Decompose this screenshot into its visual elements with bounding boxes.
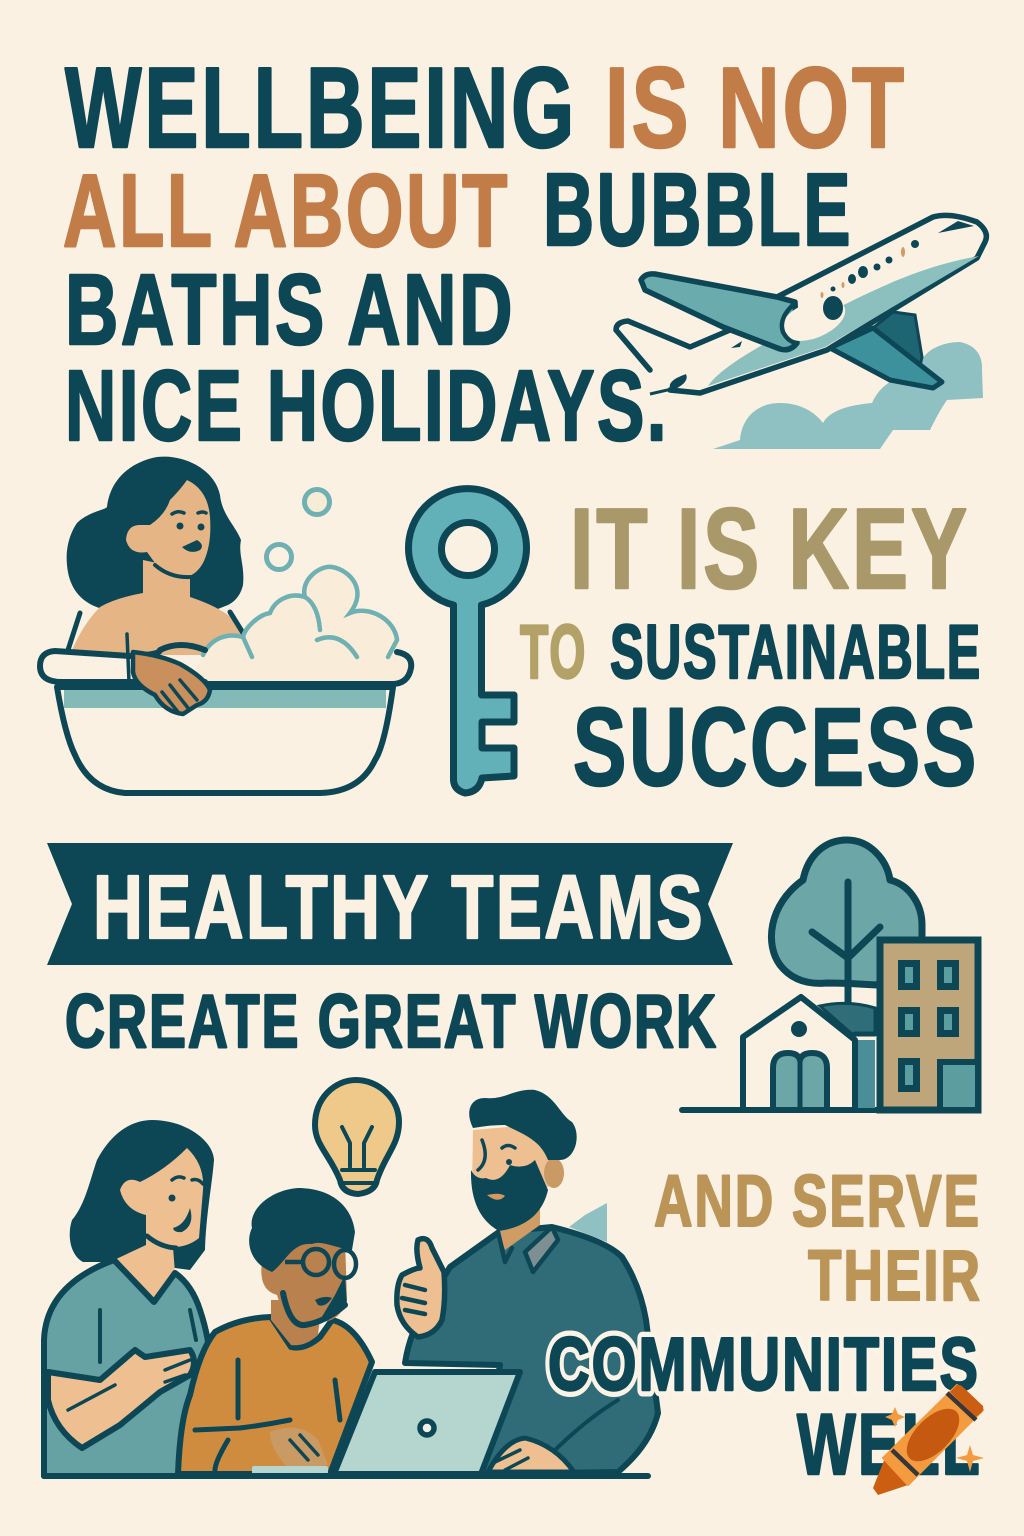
windows	[731, 240, 919, 348]
forearm and hand	[48, 1350, 194, 1448]
banner: healthy teams	[47, 843, 733, 965]
title: BATHS AND	[65, 254, 515, 366]
right hand on laptop	[488, 1438, 574, 1472]
house	[743, 997, 855, 1110]
crayon tip	[873, 1458, 908, 1495]
icon: airplane over cloud	[616, 215, 986, 449]
crayon cap	[950, 1385, 983, 1417]
subheading: create great work: CREATE GREAT WORK	[65, 979, 718, 1063]
teal background patch	[569, 1203, 607, 1242]
face	[261, 1236, 347, 1322]
windows	[902, 964, 956, 1088]
title	[63, 45, 907, 462]
title: NICE HOLIDAYS.	[65, 350, 669, 462]
text: it is key to sustainable success: TO	[520, 610, 587, 695]
face	[472, 1125, 555, 1205]
hair	[70, 1120, 214, 1270]
sweater	[178, 1317, 372, 1474]
keyboard base	[252, 1466, 328, 1474]
far wing and engine	[873, 312, 922, 375]
icon: woman in bubble bath	[40, 457, 412, 793]
neck and face	[114, 1148, 203, 1302]
tree	[771, 840, 922, 985]
person: bearded man in teal sweater	[397, 1090, 658, 1474]
glasses	[285, 1249, 356, 1278]
hand on keyboard	[270, 1428, 328, 1470]
house side wall	[858, 1040, 875, 1108]
icon: tree, house and building	[682, 840, 978, 1110]
crayon body	[883, 1385, 983, 1485]
ear	[544, 1158, 564, 1188]
title: WELLBEING	[65, 45, 577, 172]
cloud	[713, 342, 983, 449]
sweater	[405, 1227, 658, 1474]
tub body	[57, 687, 393, 793]
beard	[471, 1160, 548, 1231]
laptop	[252, 1372, 574, 1474]
hair	[469, 1090, 577, 1160]
text: it is key to sustainable success	[520, 486, 982, 809]
ground line	[682, 1107, 978, 1113]
icon: key	[409, 489, 526, 793]
near wing	[641, 274, 797, 350]
building door	[940, 1062, 978, 1110]
sparkle	[885, 1407, 905, 1427]
crayon bands	[892, 1393, 976, 1475]
neck	[271, 1300, 322, 1345]
person: woman in teal shirt	[44, 1120, 214, 1476]
title: ALL ABOUT	[63, 153, 510, 268]
apartment building	[880, 940, 978, 1110]
hair	[249, 1188, 355, 1272]
person: man with glasses in orange sweater	[178, 1188, 372, 1474]
water band	[64, 690, 386, 708]
hand	[133, 652, 210, 714]
ground line under team	[44, 1473, 648, 1479]
text: and serve their communities well	[548, 1161, 982, 1493]
neck and collar	[499, 1205, 540, 1250]
title: IS NOT	[605, 45, 907, 172]
sparkle	[956, 1445, 984, 1472]
banner: healthy teams: HEALTHY TEAMS	[93, 858, 705, 958]
tub rim	[40, 645, 411, 684]
fuselage	[616, 215, 986, 393]
title: BUBBLE	[543, 152, 853, 267]
hair	[67, 457, 243, 620]
house roof shadow	[820, 1003, 875, 1034]
crayon oval	[898, 1400, 968, 1470]
bubbles	[304, 490, 330, 514]
engine	[775, 291, 851, 349]
shirt	[44, 1260, 210, 1476]
thumbs-up hand	[397, 1239, 445, 1337]
beard	[283, 1293, 345, 1325]
shoulders and neck	[70, 560, 245, 655]
face	[126, 480, 210, 577]
icon: orange crayon with sparkles	[873, 1385, 984, 1495]
house door	[773, 1053, 827, 1110]
foam	[190, 567, 412, 682]
icon: light bulb	[315, 1080, 399, 1194]
